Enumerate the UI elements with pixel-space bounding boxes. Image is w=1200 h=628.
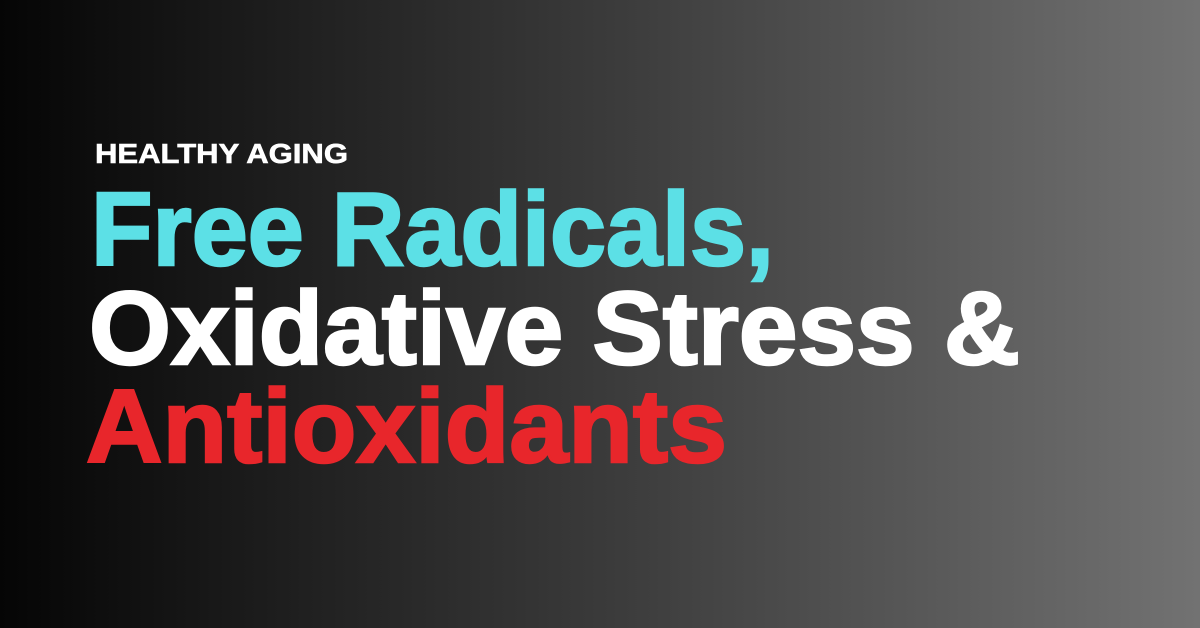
title line 2: oxidative stress: Oxidative Stress & bbox=[89, 271, 1020, 387]
eyebrow: healthy aging: HEALTHY AGING bbox=[95, 138, 348, 169]
title line 3: antioxidants: Antioxidants bbox=[86, 369, 727, 485]
title line 1: free radicals: Free Radicals, bbox=[91, 172, 774, 288]
